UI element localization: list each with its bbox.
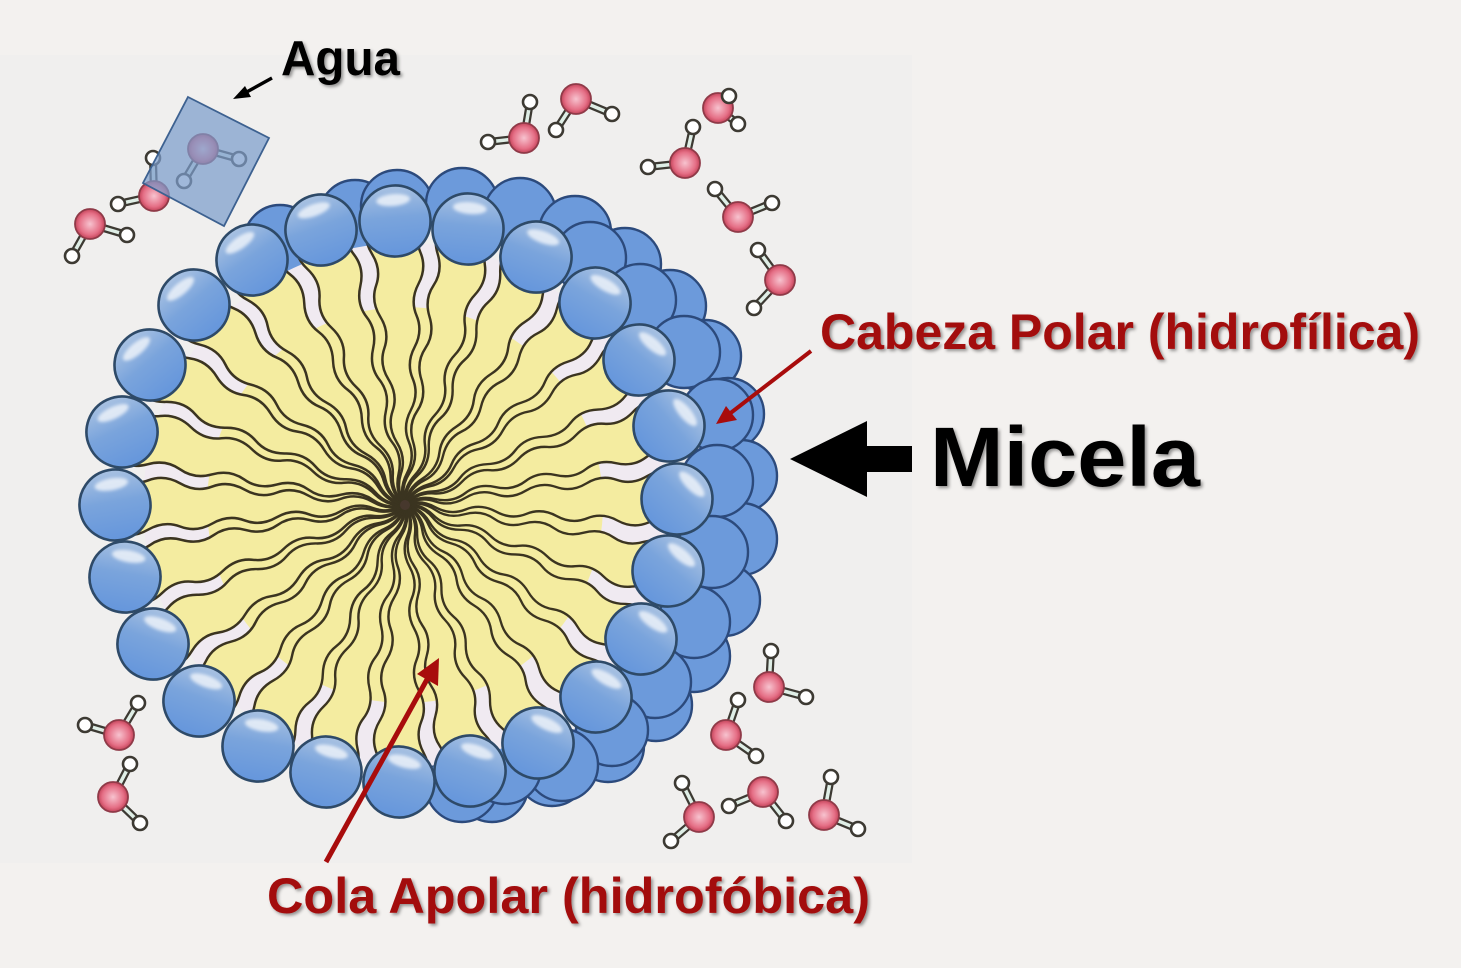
micelle: front row of polar heads	[74, 183, 727, 825]
water molecule 14	[809, 770, 865, 836]
image panel	[0, 55, 912, 863]
water molecule 15	[78, 696, 145, 750]
arrow: to apolar tail	[326, 658, 439, 862]
blue box highlighting one water molecule	[143, 97, 269, 226]
label: Cabeza Polar: Cabeza Polar (hidrofílica)	[820, 304, 1420, 360]
water molecule 5	[549, 84, 619, 137]
water molecule 4	[481, 95, 539, 153]
arrow: to polar head	[716, 351, 811, 424]
label: Agua: Agua	[281, 32, 401, 86]
water molecules	[65, 84, 865, 848]
label: Cola Apolar: Cola Apolar (hidrofóbica)	[267, 868, 870, 924]
micelle: core backing	[143, 243, 667, 767]
micelle: apolar tails	[115, 221, 678, 784]
water molecule 2	[111, 151, 169, 211]
water molecule 7	[703, 89, 745, 131]
arrow: Micela pointer	[790, 421, 912, 497]
water molecule 6	[641, 120, 700, 178]
micelle: middle row of polar heads	[469, 222, 753, 804]
arrow: to water box	[233, 78, 272, 99]
water molecule 16	[98, 757, 147, 830]
micelle: yellow hydrophobic core	[207, 307, 603, 703]
water molecule 1	[65, 209, 134, 263]
water molecule 10	[754, 644, 813, 704]
water molecule 3 (highlighted)	[177, 134, 246, 188]
water molecule 12	[664, 776, 714, 848]
water molecule 11	[711, 693, 763, 763]
water molecule 13	[722, 777, 793, 828]
micelle: dark centre where tails converge	[400, 500, 410, 510]
label: Micela: Micela	[930, 410, 1201, 504]
micelle: back row of polar heads	[244, 168, 777, 822]
water molecule 8	[708, 182, 779, 232]
water molecule 9	[747, 243, 795, 315]
